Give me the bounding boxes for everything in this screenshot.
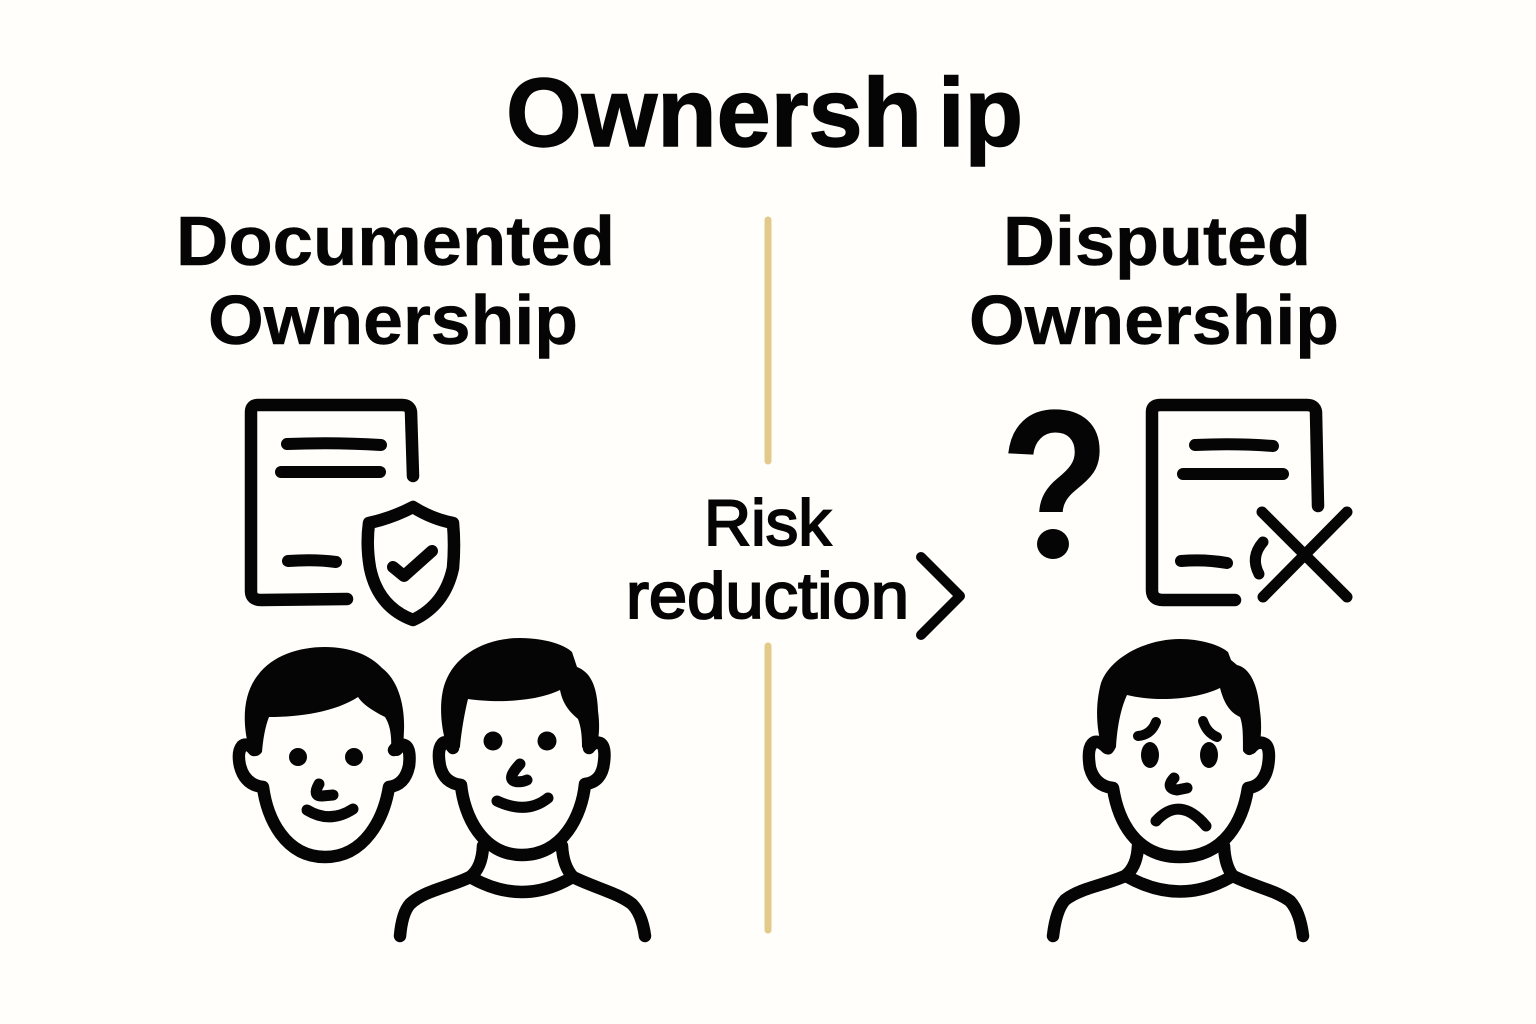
nose xyxy=(512,764,527,782)
label: risk reduction: reduction xyxy=(626,559,909,632)
icon: question mark: ? xyxy=(1000,366,1110,601)
arrow: chevron xyxy=(921,557,960,635)
label: risk reduction xyxy=(626,486,909,632)
heading: disputed ownership: Ownership xyxy=(969,281,1339,359)
mouth xyxy=(497,798,548,807)
hair xyxy=(245,647,404,756)
neck and shoulders xyxy=(400,846,483,936)
label: risk reduction: Risk xyxy=(704,486,831,559)
hair xyxy=(1097,639,1261,755)
icon: smiling person with shoulders xyxy=(400,638,645,936)
neck and shoulders xyxy=(1053,846,1138,936)
heading: documented ownership: Documented xyxy=(176,202,615,280)
mouth xyxy=(307,809,353,817)
icon: shield with check xyxy=(368,507,454,620)
face outline xyxy=(239,745,410,857)
divider: upper xyxy=(764,220,772,461)
heading: documented ownership xyxy=(176,202,615,359)
title: ip xyxy=(938,58,1023,167)
nose xyxy=(1170,778,1187,790)
face outline xyxy=(439,742,604,855)
heading: disputed ownership xyxy=(969,202,1339,359)
hair xyxy=(441,638,599,752)
eyes xyxy=(1141,742,1159,768)
icon: sad person xyxy=(1053,639,1303,936)
icon: cross xyxy=(1262,512,1347,597)
icon: smiling person left xyxy=(239,647,410,857)
heading: disputed ownership: Disputed xyxy=(1003,202,1311,280)
icon: verified document with shield xyxy=(251,405,454,620)
divider: lower xyxy=(764,646,772,930)
seal fragment xyxy=(1255,542,1263,574)
title: Ownersh xyxy=(506,58,922,167)
face outline xyxy=(1089,742,1269,857)
nose xyxy=(316,784,333,796)
eyebrows xyxy=(1138,722,1156,736)
mouth xyxy=(1156,809,1206,826)
eyes xyxy=(289,748,307,766)
icon: question mark xyxy=(1008,409,1100,559)
heading: documented ownership: Ownership xyxy=(208,281,578,359)
icon: rejected document xyxy=(1152,405,1347,600)
eyes xyxy=(484,732,502,750)
